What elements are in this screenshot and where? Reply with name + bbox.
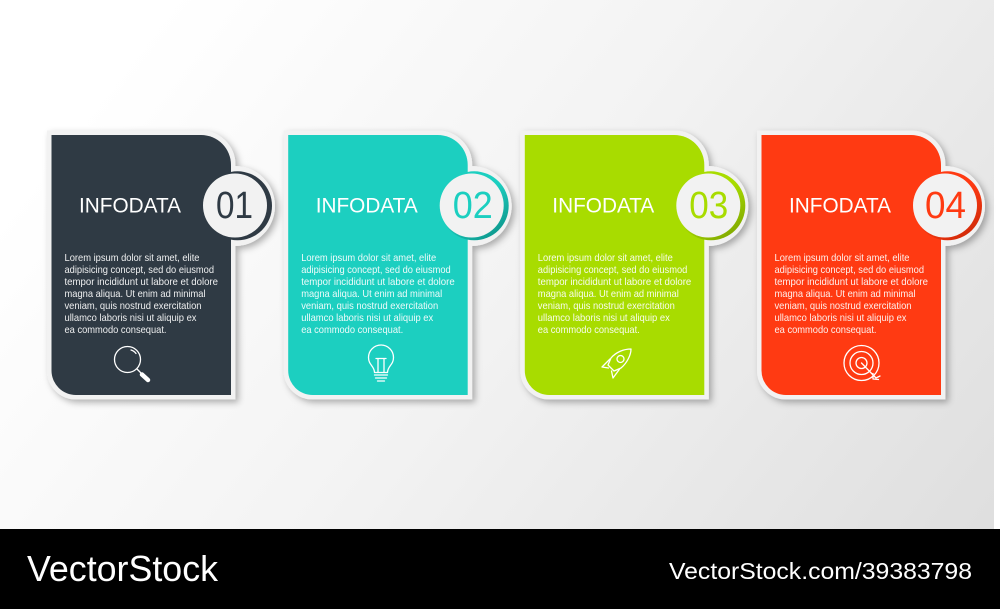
card 02 number disc — [440, 174, 504, 238]
card 01 fill — [52, 135, 231, 395]
panel: card 04 — [762, 135, 985, 395]
card 02 fill — [288, 135, 468, 395]
panel: card 03 — [525, 135, 748, 395]
card 02 body text: ullamco laboris nisi ut aliquip ex — [301, 313, 433, 324]
card 04 body text: veniam, quis nostrud exercitation — [774, 301, 912, 312]
card 01 body text: Lorem ipsum dolor sit amet, elite — [64, 253, 200, 264]
card 04 body text: adipisicing concept, sed do eiusmod — [774, 265, 924, 276]
card 02 body text: magna aliqua. Ut enim ad minimal — [301, 289, 442, 300]
card 04 number ring — [913, 171, 982, 240]
card 03 body text — [538, 253, 692, 336]
card 01 body text: ullamco laboris nisi ut aliquip ex — [64, 313, 196, 324]
card 01 body text: adipisicing concept, sed do eiusmod — [64, 265, 214, 276]
card 03 fill — [525, 135, 704, 395]
card 04 body text: Lorem ipsum dolor sit amet, elite — [774, 253, 910, 264]
card 03 body text: Lorem ipsum dolor sit amet, elite — [538, 253, 673, 264]
card 01 number: 01 — [216, 185, 253, 227]
card 02 border and shadow — [288, 135, 512, 395]
card 03 border and shadow — [525, 135, 748, 395]
card 04 border and shadow — [762, 135, 985, 395]
card 04 fill — [762, 135, 941, 395]
card 02 number ring — [440, 171, 509, 240]
card 01 number disc — [203, 174, 267, 238]
card 03 body text: ea commodo consequat. — [538, 325, 640, 336]
card 01 body text: ea commodo consequat. — [64, 325, 166, 336]
card 03 body text: adipisicing concept, sed do eiusmod — [538, 265, 688, 276]
card 03 body text: veniam, quis nostrud exercitation — [538, 301, 675, 312]
card 03 heading: INFODATA — [552, 194, 655, 218]
footer brand: VectorStock — [27, 548, 219, 589]
card 03 number ring — [676, 171, 745, 240]
card 01 number ring — [203, 171, 272, 240]
card 03 number: 03 — [689, 185, 728, 227]
card 04 body text: tempor incididunt ut labore et dolore — [774, 277, 928, 288]
card 03 body text: ullamco laboris nisi ut aliquip ex — [538, 313, 670, 324]
card 02 body text: ea commodo consequat. — [301, 325, 403, 336]
card 03 body text: magna aliqua. Ut enim ad minimal — [538, 289, 679, 300]
card 01 body text: magna aliqua. Ut enim ad minimal — [64, 289, 206, 300]
card 01 body text: veniam, quis nostrud exercitation — [64, 301, 202, 312]
card 04 body text: ea commodo consequat. — [774, 325, 876, 336]
card 02 body text — [301, 253, 455, 336]
card 04 body text — [774, 253, 928, 336]
card 01 body text — [64, 253, 218, 336]
card 04 number: 04 — [925, 185, 966, 227]
card 01 heading: INFODATA — [79, 194, 182, 218]
panel: card 01 — [52, 135, 275, 395]
icon: light bulb — [368, 345, 394, 381]
card 02 body text: tempor incididunt ut labore et dolore — [301, 277, 455, 288]
card 04 body text: ullamco laboris nisi ut aliquip ex — [774, 313, 906, 324]
icon: rocket — [602, 349, 631, 378]
card 02 body text: Lorem ipsum dolor sit amet, elite — [301, 253, 436, 264]
icon: magnifying glass — [114, 346, 148, 380]
panel: card 02 — [288, 135, 512, 395]
card 04 number disc — [913, 174, 977, 238]
card 02 body text: adipisicing concept, sed do eiusmod — [301, 265, 451, 276]
card 02 heading: INFODATA — [316, 194, 418, 218]
card 01 body text: tempor incididunt ut labore et dolore — [64, 277, 218, 288]
footer image id: VectorStock.com/39383798 — [669, 558, 972, 584]
card 04 body text: magna aliqua. Ut enim ad minimal — [774, 289, 916, 300]
card 03 number disc — [676, 174, 740, 238]
card 01 border and shadow — [52, 135, 275, 395]
footer bar — [0, 529, 1000, 609]
card 02 body text: veniam, quis nostrud exercitation — [301, 301, 438, 312]
icon: target with arrow — [844, 346, 880, 380]
card 04 heading: INFODATA — [789, 194, 892, 218]
card 03 body text: tempor incididunt ut labore et dolore — [538, 277, 692, 288]
card 02 number: 02 — [453, 185, 493, 227]
